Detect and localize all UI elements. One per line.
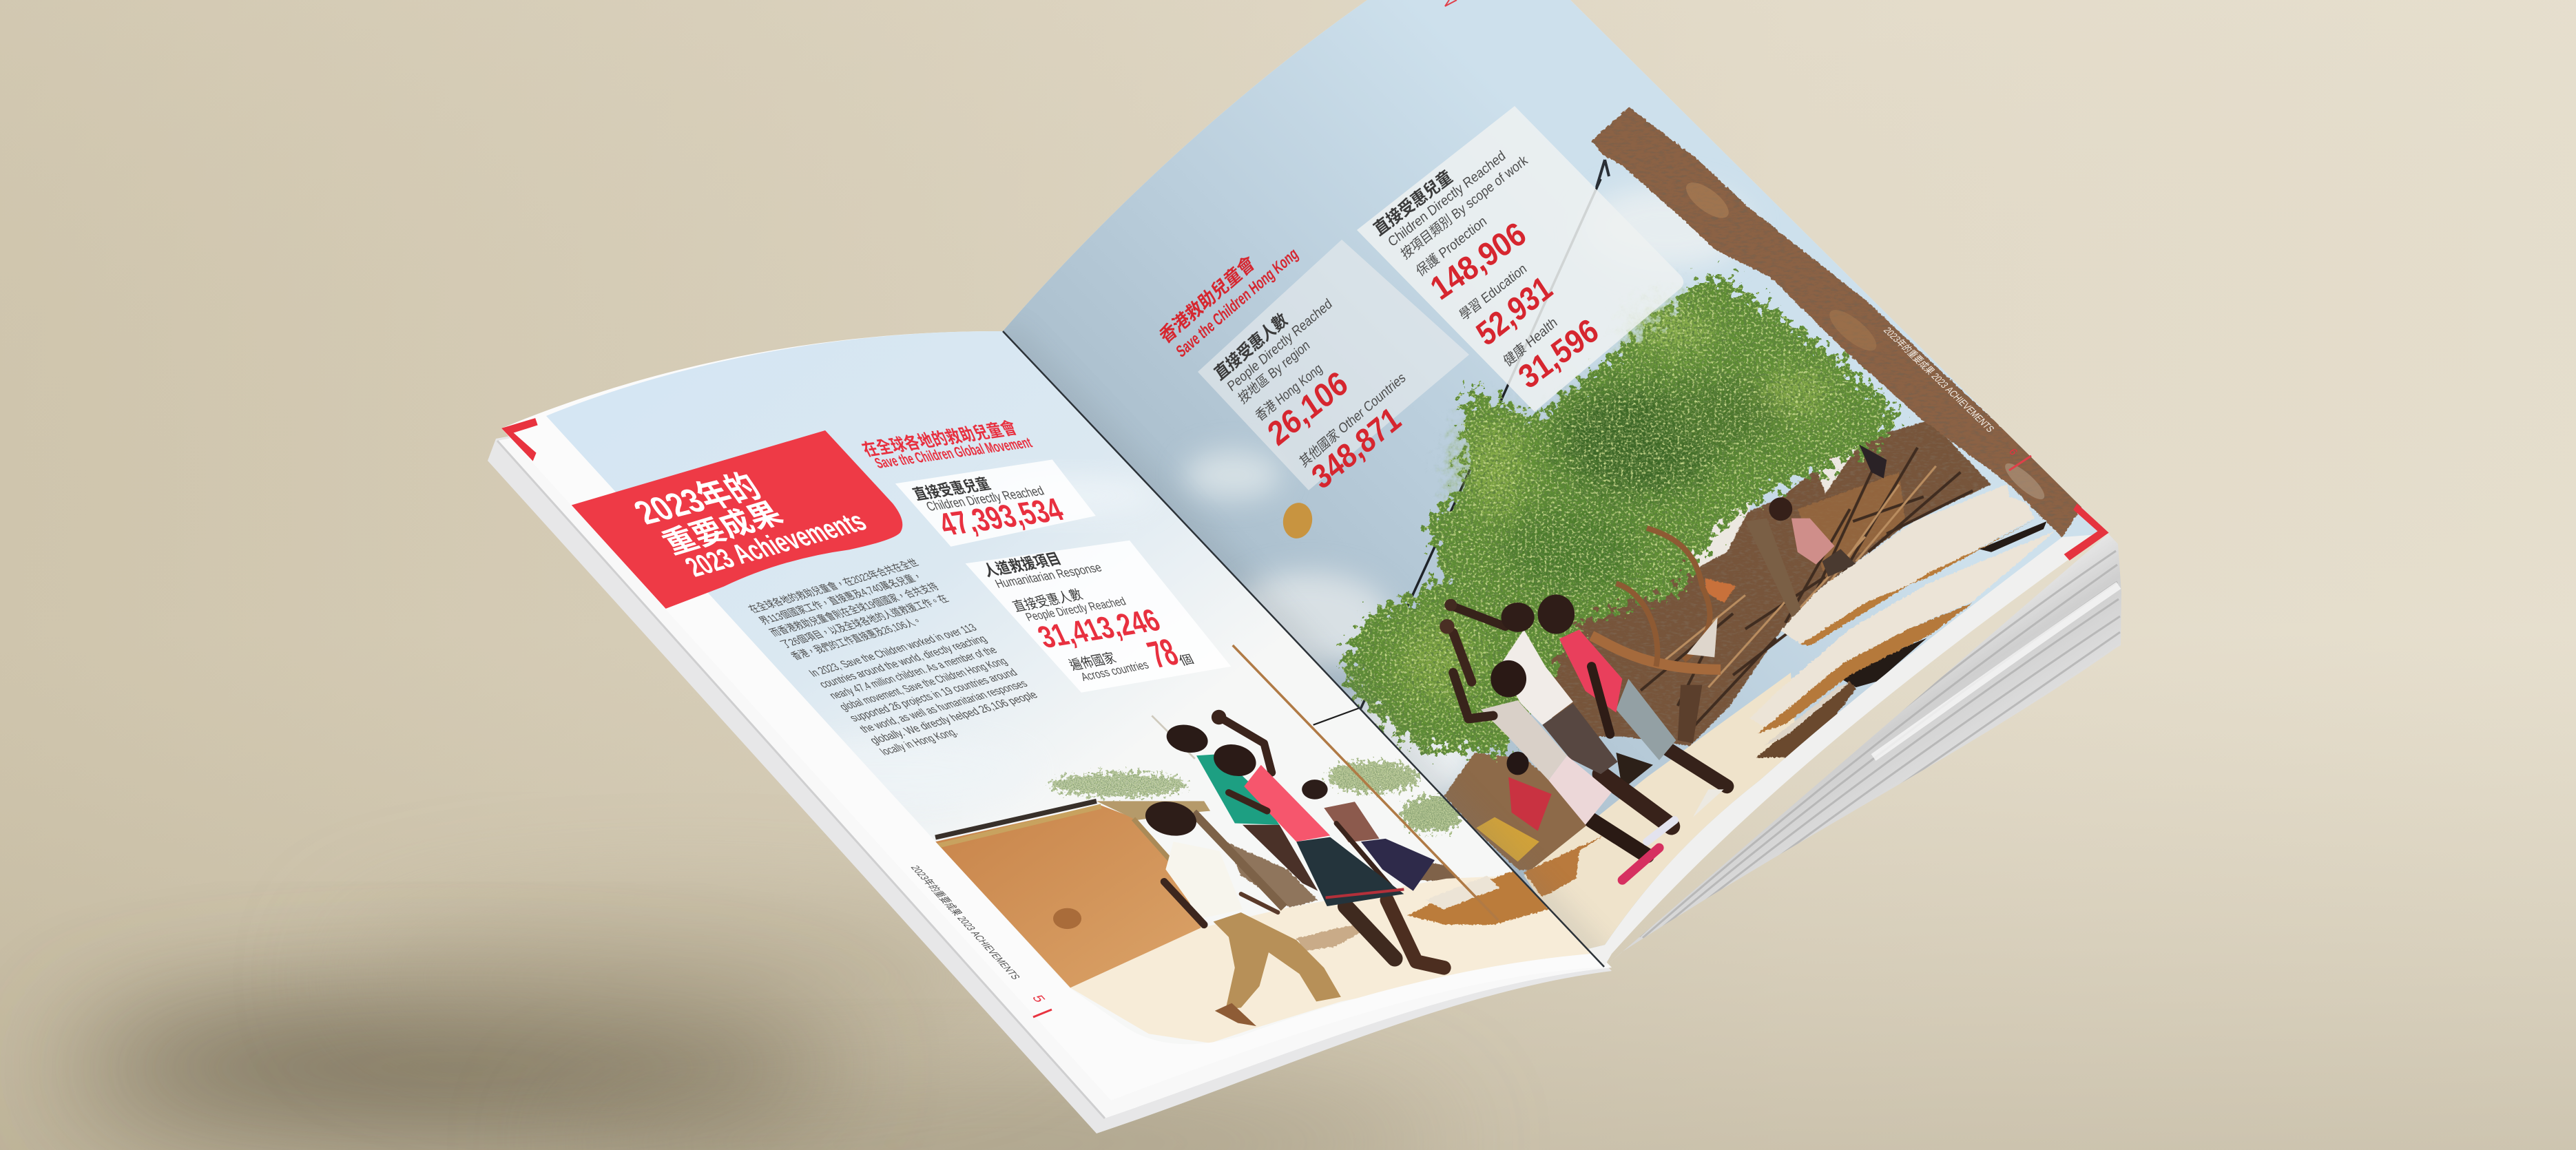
body text: Chinese: 而香港救助兒童會則在全球19個國家，合共支持 <box>767 581 942 638</box>
card: children directly reached: 直接受惠兒童 <box>910 474 993 503</box>
stick fence <box>1225 841 1318 908</box>
red corner mark at top <box>1445 0 1457 6</box>
card: children directly reached: 47,393,534 <box>933 491 1069 543</box>
logs with white bark and background child <box>1745 445 2056 757</box>
sky background and photo: children playing <box>546 331 1590 1043</box>
running footer: right page: 2023年的重要成果 2023 ACHIEVEMENTS <box>1881 326 1997 435</box>
branches <box>1641 448 1973 731</box>
ball <box>1280 501 1315 541</box>
title: 2023 achievements <box>626 468 873 583</box>
title: 2023 achievements: 2023 Achievements <box>678 505 873 583</box>
ground <box>1524 673 1800 974</box>
child: red top seated <box>1506 751 1552 831</box>
full-bleed photo <box>964 0 2135 978</box>
body text: English: In 2023, Save the Children worked in over 113 <box>806 622 979 679</box>
child: pink shirt and denim shorts <box>1538 594 1727 817</box>
foreground: branches, root, chair, children <box>1440 528 1727 897</box>
body text: Chinese: 界113個國家工作，直接惠及4,740萬名兒童， <box>756 571 926 627</box>
heading: global movement: 在全球各地的救助兒童會 <box>859 419 1020 459</box>
shading at the spine <box>1003 331 1604 967</box>
card: people directly reached by region <box>1198 240 1469 496</box>
page number 6 <box>2006 447 2031 470</box>
card: children directly reached by scope of work: 按項目類別 By scope of work <box>1398 152 1530 262</box>
post and white stick <box>1194 813 1284 908</box>
child: pink shirt <box>1210 710 1444 968</box>
card: children directly reached by scope of work: 保護 Protection <box>1413 213 1490 280</box>
root on the ground <box>1296 869 1548 951</box>
page stack: left side <box>488 341 1612 1133</box>
bush near spine <box>1444 753 1616 879</box>
body text: English <box>806 622 1050 757</box>
card: people directly reached by region: 按地區 By region <box>1236 337 1313 407</box>
body text: English: globally. We directly helped 26,106 people <box>867 689 1040 746</box>
card: people directly reached by region: People Directly Reached <box>1225 296 1335 395</box>
page stack: right side <box>1610 534 2121 963</box>
page number 5: 5 <box>1028 994 1048 1004</box>
body text: Chinese <box>746 557 964 662</box>
card: children directly reached by scope of work: 31,596 <box>1513 312 1605 396</box>
body text: English: locally in Hong Kong. <box>877 726 960 757</box>
card: humanitarian response: 直接受惠人數 <box>1010 587 1085 614</box>
page number 6: 6 <box>2006 447 2019 457</box>
house <box>935 801 1210 987</box>
card: children directly reached by scope of work: 148,906 <box>1424 216 1533 307</box>
heading: global movement <box>859 419 1035 471</box>
spine crease <box>1003 331 1604 967</box>
card: people directly reached by region: 348,871 <box>1306 400 1407 496</box>
page paper <box>1003 0 2108 967</box>
corner bracket <box>501 418 538 461</box>
log <box>1592 107 2084 538</box>
panel: right page <box>964 0 2135 978</box>
card: people directly reached by region: 其他國家 Other Countries <box>1297 369 1409 470</box>
card: children directly reached by scope of work: 直接受惠兒童 <box>1371 167 1456 240</box>
ground <box>1070 875 1610 1043</box>
card: humanitarian response <box>966 541 1231 693</box>
card: humanitarian response: 遍佈國家 <box>1067 651 1119 673</box>
child: printed shirt in front <box>1453 660 1612 825</box>
card: people directly reached by region: 26,106 <box>1262 364 1354 453</box>
card: people directly reached by region: 香港 Hong Kong <box>1253 360 1325 424</box>
card: children directly reached by scope of work <box>1357 106 1683 412</box>
clouds <box>1185 186 1749 813</box>
heading: Save the Children Hong Kong: 香港救助兒童會 <box>1156 252 1258 348</box>
child: white shirt and khaki trousers <box>1142 797 1341 1026</box>
running footer: left page: 2023年的重要成果 2023 ACHIEVEMENTS <box>908 864 1022 981</box>
card: humanitarian response: People Directly Reached <box>1024 595 1128 624</box>
card: children directly reached by scope of work: Children Directly Reached <box>1386 148 1508 250</box>
brush fence behind the children <box>1530 420 1991 746</box>
red title banner <box>572 430 902 609</box>
page number 5 <box>1028 994 1052 1017</box>
card: humanitarian response: 31,413,246 <box>1032 603 1166 655</box>
child: green shirt <box>1164 721 1318 891</box>
child: white vest and grey shorts <box>1440 599 1674 880</box>
body text: Chinese: 香港，我們的工作直接惠及26,106人。 <box>789 615 926 662</box>
title: 2023 achievements: 2023年的 <box>626 468 769 532</box>
distant trees <box>1050 762 1462 833</box>
card: children directly reached <box>895 459 1096 547</box>
body text: English: nearly 47.4 million children. As a member of the <box>827 644 999 702</box>
card: humanitarian response: 個 <box>1176 652 1196 668</box>
card: humanitarian response: 78 <box>1141 631 1185 676</box>
card: humanitarian response: 人道救援項目 <box>981 550 1064 580</box>
heading: global movement: Save the Children Global Movement <box>872 434 1035 471</box>
child: girl in stripes <box>1302 780 1435 891</box>
body text: English: countries around the world, directly reaching <box>816 633 990 690</box>
card: children directly reached by scope of work: 健康 Health <box>1501 314 1560 370</box>
body text: English: the world, as well as humanitarian responses <box>857 678 1030 735</box>
body text: Chinese: 了26個項目，以及全球各地的人道救援工作。在 <box>778 593 951 650</box>
card: children directly reached by scope of work: 52,931 <box>1471 269 1559 353</box>
page paper <box>501 331 1604 1100</box>
body text: English: global movement, Save the Children Hong Kong <box>836 656 1010 713</box>
heading: Save the Children Hong Kong: Save the Children Hong Kong <box>1173 244 1301 362</box>
corner bracket <box>2064 503 2109 561</box>
panel: left page <box>501 331 1590 1043</box>
tall stick and wire <box>1233 645 1498 920</box>
card: children directly reached by scope of work: 學習 Education <box>1457 260 1530 324</box>
wire with hook <box>1315 160 1609 725</box>
tree <box>1342 273 1899 753</box>
title: 2023 achievements: 重要成果 <box>656 497 789 561</box>
card: humanitarian response: Across countries <box>1079 658 1151 684</box>
card: people directly reached by region: 直接受惠人數 <box>1212 310 1291 384</box>
background child <box>1745 445 1887 617</box>
body text: English: supported 26 projects in 19 countries around <box>846 667 1020 724</box>
body text: Chinese: 在全球各地的救助兒童會，在2023年合共在全世 <box>746 557 922 615</box>
heading: Save the Children Hong Kong <box>1156 244 1301 362</box>
card: humanitarian response: Humanitarian Response <box>993 561 1104 591</box>
card: children directly reached: Children Directly Reached <box>924 484 1047 514</box>
